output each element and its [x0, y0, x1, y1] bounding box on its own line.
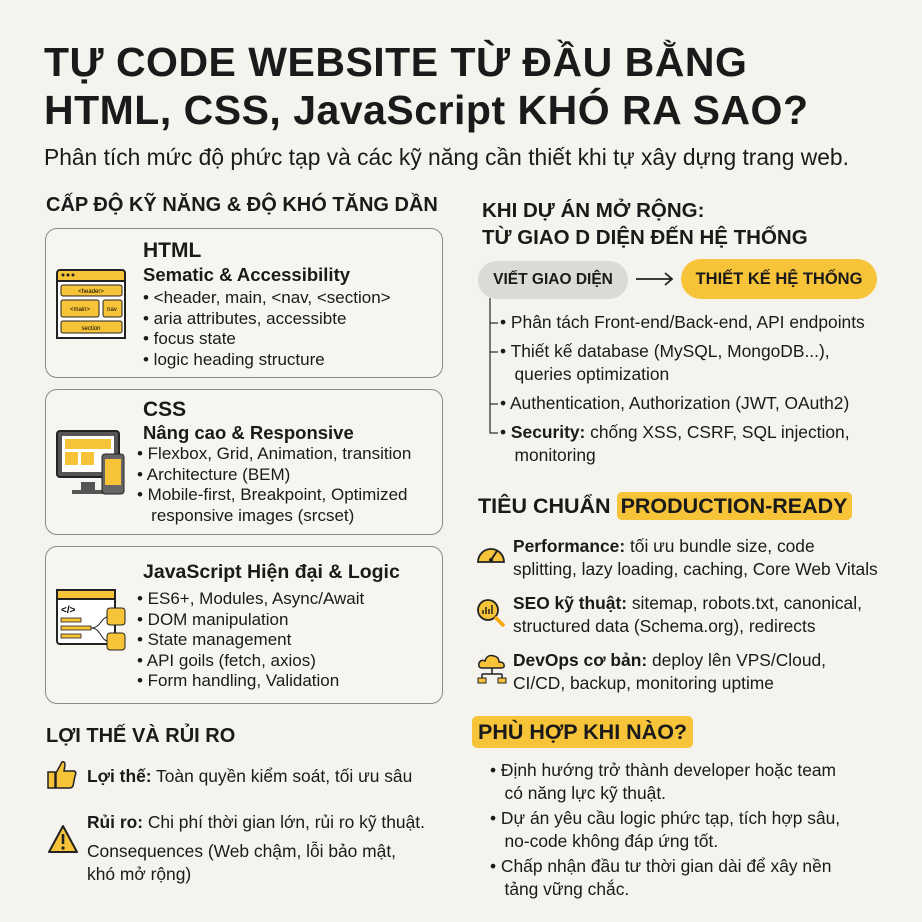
- title: [44, 39, 808, 133]
- text: JavaScript: • State management: [137, 630, 291, 649]
- panel: CSS: [45, 389, 443, 535]
- panel: HTML: [45, 228, 443, 378]
- icon: warning: [48, 825, 78, 853]
- icon: code window: </>: [61, 605, 76, 616]
- list: suitable cases: có năng lực kỹ thuật.: [504, 783, 666, 803]
- icon: cloud network: [478, 654, 506, 684]
- list: suitable cases: • Chấp nhận đầu tư thời gian dài để xây nền: [490, 856, 831, 876]
- list: system tasks: • Security: chống XSS, CSRF, SQL injection,: [500, 422, 850, 442]
- text: JavaScript: • API goils (fetch, axios): [137, 650, 316, 670]
- heading: project expansion: [482, 198, 808, 249]
- list: system tasks: monitoring: [514, 445, 596, 465]
- icon: responsive devices: [56, 430, 124, 494]
- text: devops: DevOps cơ bản: deploy lên VPS/Cloud,: [513, 650, 826, 670]
- text: risks: khó mở rộng): [87, 864, 191, 884]
- text: JavaScript: • ES6+, Modules, Async/Await: [137, 589, 364, 608]
- icon: html layout: <main>: [70, 307, 91, 313]
- list: suitable cases: [490, 760, 840, 899]
- icon: code window: [56, 589, 126, 650]
- text: CSS: • Mobile-first, Breakpoint, Optimized: [137, 485, 408, 504]
- text: CSS: • Architecture (BEM): [137, 464, 290, 484]
- pill: system design: [681, 259, 877, 299]
- text: HTML: • <header, main, <nav, <section>: [143, 288, 391, 307]
- arrow: [636, 272, 674, 286]
- text: HTML: • aria attributes, accessibte: [143, 308, 346, 328]
- list: suitable cases: • Định hướng trở thành developer hoặc team: [490, 760, 836, 780]
- list: suitable cases: tảng vững chắc.: [504, 879, 629, 899]
- icon: seo magnifier: [477, 599, 506, 628]
- text: HTML: Sematic & Accessibility: [143, 264, 350, 285]
- icon: thumbs up: [47, 761, 77, 789]
- title: TỰ CODE WEBSITE TỪ ĐẦU BẰNG: [44, 39, 747, 85]
- text: CSS: Nâng cao & Responsive: [143, 422, 354, 443]
- subtitle: Phân tích mức độ phức tạp và các kỹ năng cần thiết khi tự xây dựng trang web.: [44, 144, 849, 170]
- text: HTML: • logic heading structure: [143, 350, 325, 368]
- heading: project expansion: KHI DỰ ÁN MỞ RỘNG:: [482, 199, 704, 222]
- icon: html layout: section: [81, 326, 101, 332]
- text: JavaScript: JavaScript Hiện đại & Logic: [143, 561, 400, 583]
- text: HTML: HTML: [143, 239, 201, 262]
- text: HTML: [143, 239, 391, 368]
- text: risks: Rủi ro: Chi phí thời gian lớn, rủi ro kỹ thuật.: [87, 812, 425, 832]
- tree connector: [489, 298, 498, 434]
- text: pros: Lợi thế: Toàn quyền kiểm soát, tối ưu sâu: [87, 766, 412, 786]
- heading: when suitable: PHÙ HỢP KHI NÀO?: [478, 720, 687, 744]
- list: suitable cases: no-code không đáp ứng tốt.: [504, 831, 718, 851]
- text: performance: splitting, lazy loading, caching, Core Web Vitals: [513, 559, 878, 579]
- text: seo: SEO kỹ thuật: sitemap, robots.txt, canonical,: [513, 593, 862, 613]
- title: HTML, CSS, JavaScript KHÓ RA SAO?: [44, 87, 808, 133]
- pill: system design: THIẾT KẾ HỆ THỐNG: [696, 270, 862, 288]
- text: CSS: [137, 398, 411, 524]
- heading: project expansion: TỪ GIAO D DIỆN ĐẾN HỆ THỐNG: [482, 226, 808, 249]
- panel: JavaScript: [45, 546, 443, 704]
- text: seo: structured data (Schema.org), redirects: [513, 616, 816, 636]
- icon: html layout: <header>: [78, 289, 104, 295]
- text: performance: Performance: tối ưu bundle size, code: [513, 536, 815, 556]
- heading: pros and risks: LỢI THẾ VÀ RỦI RO: [46, 725, 235, 747]
- heading: production ready: TIÊU CHUẨN PRODUCTION-READY: [478, 494, 848, 518]
- text: CSS: CSS: [143, 398, 186, 421]
- text: seo: [513, 593, 862, 636]
- text: devops: CI/CD, backup, monitoring uptime: [513, 673, 774, 693]
- text: risks: Consequences (Web chậm, lỗi bảo mật,: [87, 841, 396, 861]
- list: system tasks: queries optimization: [514, 364, 669, 384]
- text: JavaScript: • Form handling, Validation: [137, 671, 339, 690]
- heading: skill levels: CẤP ĐỘ KỸ NĂNG & ĐỘ KHÓ TĂNG DẦN: [46, 194, 438, 216]
- list: system tasks: • Thiết kế database (MySQL, MongoDB...),: [500, 341, 830, 361]
- text: JavaScript: • DOM manipulation: [137, 610, 288, 628]
- text: risks: [87, 812, 425, 884]
- text: performance: [513, 536, 878, 579]
- text: CSS: responsive images (srcset): [151, 506, 354, 524]
- text: CSS: • Flexbox, Grid, Animation, transition: [137, 444, 411, 463]
- icon: html layout: nav: [107, 307, 117, 313]
- text: HTML: • focus state: [143, 329, 236, 348]
- text: JavaScript: [137, 561, 400, 690]
- list: system tasks: [500, 312, 865, 465]
- list: system tasks: • Authentication, Authorization (JWT, OAuth2): [500, 393, 849, 413]
- icon: gauge: [477, 548, 505, 563]
- text: devops: [513, 650, 826, 693]
- pill: front-end: [478, 261, 628, 299]
- icon: html layout: [56, 269, 126, 339]
- list: suitable cases: • Dự án yêu cầu logic phức tạp, tích hợp sâu,: [490, 808, 840, 828]
- list: system tasks: • Phân tách Front-end/Back-end, API endpoints: [500, 312, 865, 332]
- pill: front-end: VIẾT GIAO DIỆN: [493, 271, 613, 288]
